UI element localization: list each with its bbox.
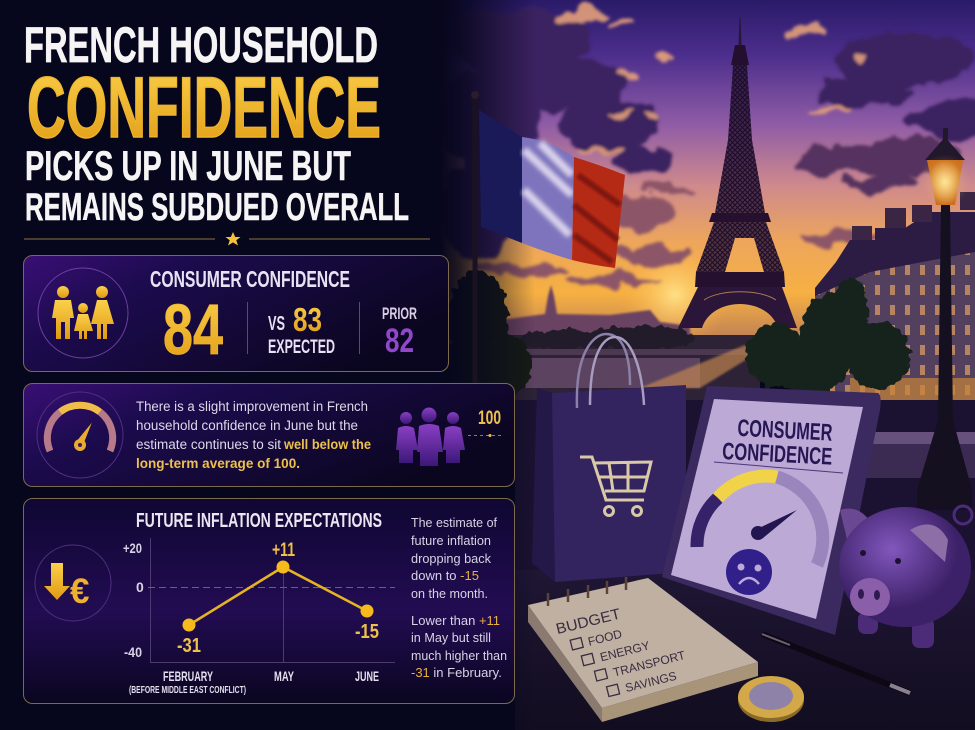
budget notebook: ENERGY xyxy=(599,638,651,664)
tablet heading xyxy=(722,414,834,471)
budget notebook xyxy=(528,577,758,722)
photo scene: Paris at sunset xyxy=(440,0,975,730)
budget notebook: FOOD xyxy=(586,627,624,649)
piggy bank xyxy=(839,506,972,648)
body text xyxy=(136,399,371,471)
budget notebook: SAVINGS xyxy=(624,669,678,695)
line chart: -40 xyxy=(124,644,142,660)
reference value 100 xyxy=(468,408,503,437)
river and bridge area xyxy=(500,335,760,400)
commentary text: dropping back xyxy=(411,551,491,566)
shopping bag xyxy=(532,334,686,582)
tablet heading: CONSUMER xyxy=(737,415,833,447)
title divider with star xyxy=(24,232,430,246)
title xyxy=(24,17,409,229)
commentary text: Lower than +11 xyxy=(411,613,500,628)
body text: estimate continues to sit xyxy=(136,437,281,452)
value 84: 84 xyxy=(163,291,223,370)
terrace balustrade xyxy=(515,400,975,570)
commentary text xyxy=(411,515,507,680)
line chart: MAY xyxy=(274,668,294,684)
prior value xyxy=(382,304,417,360)
tablet with gauge xyxy=(662,386,881,635)
commentary text: future inflation xyxy=(411,533,491,548)
versus expected: EXPECTED xyxy=(268,337,335,358)
line chart: -15 xyxy=(355,621,379,643)
icon: family xyxy=(38,268,128,358)
prior value: 82 xyxy=(385,322,414,360)
tablet heading: CONFIDENCE xyxy=(722,438,833,471)
line chart: +11 xyxy=(272,540,295,561)
euro coin xyxy=(738,676,804,722)
body text: household confidence in June but the xyxy=(136,418,358,433)
trees right xyxy=(745,278,910,394)
prior value: PRIOR xyxy=(382,304,417,323)
panel: future inflation expectations xyxy=(24,498,514,704)
sad face xyxy=(726,549,772,595)
commentary text: much higher than xyxy=(411,648,507,663)
commentary text: on the month. xyxy=(411,586,488,601)
commentary text: -31 in February. xyxy=(411,665,502,680)
trees left xyxy=(449,270,532,396)
panel: long-term average xyxy=(24,384,514,486)
budget notebook: TRANSPORT xyxy=(612,648,687,680)
line chart: +20 xyxy=(123,540,142,556)
versus expected: VS xyxy=(268,313,285,335)
panel: consumer confidence xyxy=(24,256,448,372)
left fade into dark column xyxy=(440,0,532,400)
commentary text: in May but still xyxy=(411,630,491,645)
flag and pole xyxy=(471,91,625,385)
line chart: FEBRUARY xyxy=(163,668,213,684)
distant skyline xyxy=(506,285,692,335)
commentary text: The estimate of xyxy=(411,515,497,530)
panel heading: FUTURE INFLATION EXPECTATIONS xyxy=(136,510,382,532)
icon: gauge xyxy=(37,392,123,478)
Eiffel Tower xyxy=(678,18,797,328)
line chart xyxy=(123,538,395,696)
title: PICKS UP IN JUNE BUT xyxy=(25,142,351,189)
building right xyxy=(815,192,975,400)
versus expected xyxy=(268,301,335,358)
line chart: -31 xyxy=(177,635,201,657)
reference value 100: 100 xyxy=(478,408,501,429)
line chart: 0 xyxy=(136,579,144,595)
title: CONFIDENCE xyxy=(27,60,381,156)
cart icon xyxy=(580,457,651,516)
sun xyxy=(638,262,711,335)
icon: falling euro: € xyxy=(70,572,89,611)
icon: falling euro xyxy=(35,545,111,621)
line chart: JUNE xyxy=(355,668,379,684)
gauge arc xyxy=(697,498,718,547)
clouds xyxy=(440,6,975,285)
body text: There is a slight improvement in French xyxy=(136,399,368,414)
line chart: (BEFORE MIDDLE EAST CONFLICT) xyxy=(129,685,246,696)
street lamp xyxy=(917,128,972,510)
table top xyxy=(515,570,975,730)
title: FRENCH HOUSEHOLD xyxy=(24,17,378,73)
pen xyxy=(762,634,910,693)
body text: well below the xyxy=(283,437,371,452)
commentary text: down to -15 xyxy=(411,568,479,583)
title: REMAINS SUBDUED OVERALL xyxy=(25,186,409,229)
versus expected: 83 xyxy=(293,301,322,338)
panel heading: CONSUMER CONFIDENCE xyxy=(150,266,350,292)
body text: long-term average of 100. xyxy=(136,456,300,471)
budget notebook: BUDGET xyxy=(554,606,622,638)
icon: people xyxy=(396,408,465,466)
